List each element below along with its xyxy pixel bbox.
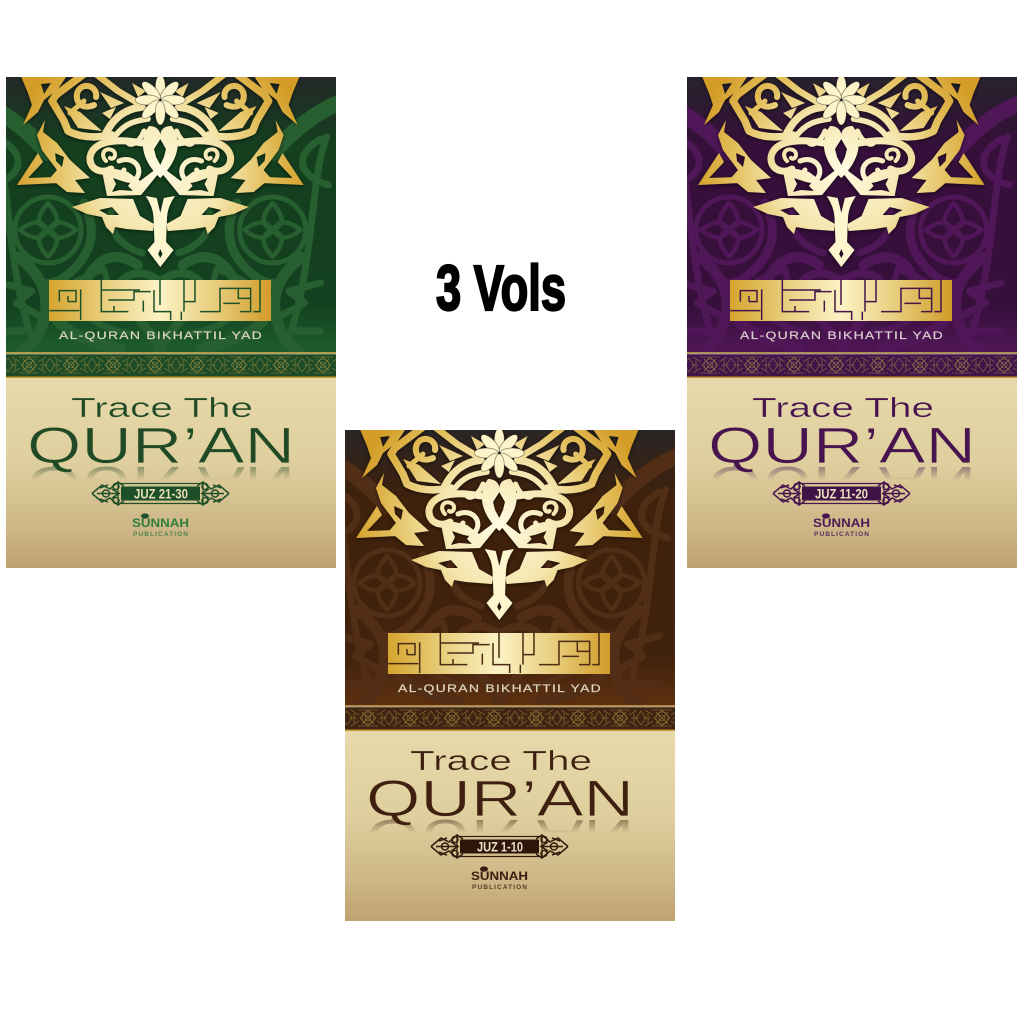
heading: Trace The: Trace The bbox=[752, 392, 934, 423]
subtitle: AL-QURAN BIKHATTIL YAD bbox=[398, 683, 602, 695]
kufic calligraphy plate bbox=[388, 631, 610, 674]
book cover: green, Juz 21-30 bbox=[0, 74, 339, 568]
heading: QUR'AN: QUR’AN bbox=[366, 770, 634, 827]
subtitle: AL-QURAN BIKHATTIL YAD bbox=[740, 330, 944, 342]
juz label with frame: JUZ 1-10 bbox=[477, 838, 523, 854]
kufic calligraphy plate bbox=[730, 278, 952, 321]
tan lower panel bbox=[687, 378, 1017, 568]
heading: QUR'AN: QUR’AN bbox=[27, 417, 295, 474]
publisher logo bbox=[132, 513, 189, 538]
tan lower panel bbox=[6, 378, 336, 568]
heading reflection: QUR’AN bbox=[366, 809, 634, 866]
publisher logo bbox=[813, 513, 870, 538]
gold floral mandala bbox=[17, 74, 304, 267]
juz label with frame bbox=[431, 835, 568, 858]
decorative band bbox=[687, 352, 1017, 378]
title: 3 Vols: 3 Vols bbox=[436, 252, 566, 324]
publisher logo: PUBLICATION bbox=[472, 884, 527, 891]
publisher logo: PUBLICATION bbox=[814, 531, 869, 538]
juz label with frame bbox=[92, 482, 229, 505]
subtitle: AL-QURAN BIKHATTIL YAD bbox=[59, 330, 263, 342]
book cover: purple, Juz 11-20 bbox=[663, 74, 1020, 568]
juz label with frame: JUZ 11-20 bbox=[815, 486, 868, 502]
gold floral mandala bbox=[356, 427, 643, 620]
tan lower panel bbox=[345, 731, 675, 921]
publisher logo: SUNNAH bbox=[132, 516, 189, 530]
publisher logo: SUNNAH bbox=[813, 516, 870, 530]
publisher logo bbox=[471, 866, 528, 891]
decorative band bbox=[345, 705, 675, 731]
purple ornamental panel bbox=[687, 77, 1017, 352]
publisher logo: SUNNAH bbox=[471, 869, 528, 883]
juz label with frame: JUZ 21-30 bbox=[134, 486, 188, 502]
heading: Trace The: Trace The bbox=[71, 392, 253, 423]
heading reflection: QUR’AN bbox=[27, 456, 295, 513]
publisher logo: PUBLICATION bbox=[133, 531, 188, 538]
decorative band bbox=[6, 352, 336, 378]
heading: QUR'AN: QUR’AN bbox=[708, 417, 976, 474]
green ornamental panel bbox=[6, 77, 336, 352]
kufic calligraphy plate bbox=[49, 278, 271, 321]
book cover: brown, Juz 1-10 bbox=[321, 427, 678, 921]
heading: Trace The: Trace The bbox=[410, 745, 592, 776]
juz label with frame bbox=[773, 482, 910, 505]
heading reflection: QUR’AN bbox=[708, 456, 976, 513]
gold floral mandala bbox=[698, 74, 985, 267]
brown ornamental panel bbox=[345, 430, 675, 705]
